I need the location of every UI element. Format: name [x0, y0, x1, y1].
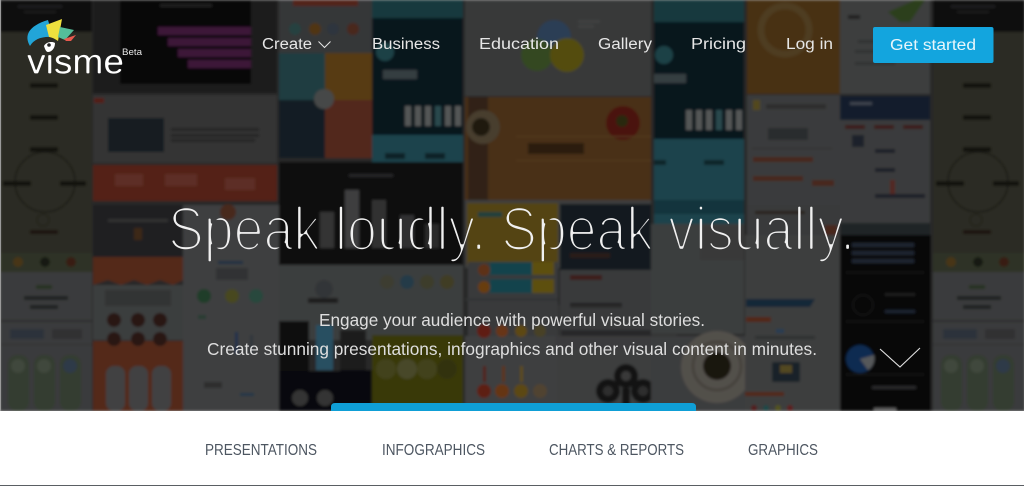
subtitle line 2: Create stunning presentations, infographics and other visual content in minutes. [207, 339, 817, 359]
thumbnail: red banner [93, 165, 277, 201]
title: Speak loudly. Speak visually. [168, 195, 855, 263]
logo [27, 19, 143, 82]
thumbnail: orange poster [93, 205, 183, 411]
tab: infographics: INFOGRAPHICS [382, 442, 485, 459]
nav item: Log in: Log in [786, 36, 833, 53]
thumbnail: teal and yellow chart [465, 200, 651, 339]
get started button: Get started [890, 37, 976, 54]
icon: colour fan eye [27, 19, 76, 52]
get started button [873, 27, 994, 63]
thumbnail: teal stats [372, 0, 463, 162]
nav item: Create: Create [262, 36, 312, 53]
thumbnail: venn diagram [465, 0, 651, 96]
subtitle line 1: Engage your audience with powerful visual stories. [319, 310, 705, 330]
tab: presentations: PRESENTATIONS [205, 442, 317, 459]
left edge strip [0, 0, 1, 411]
thumbnail: dark bar chart [279, 162, 463, 265]
tab labels [205, 442, 818, 459]
beta label: Beta [122, 47, 143, 58]
wordmark: visme [27, 42, 124, 82]
thumbnail: navy table poster [840, 96, 930, 235]
nav item: Business: Business [372, 36, 440, 53]
nav item: Create [262, 36, 330, 53]
thumbnail: teal stats second [654, 0, 744, 224]
thumbnail: wooden cutting board [465, 97, 651, 200]
nav item: Gallery: Gallery [598, 36, 652, 53]
tab: charts and reports: CHARTS & REPORTS [549, 442, 684, 459]
thumbnail: dark slide with pink bars [93, 0, 277, 93]
tab: graphics: GRAPHICS [748, 442, 818, 459]
thumbnail: infographic tiles [279, 0, 372, 158]
nav item: Education: Education [479, 36, 559, 53]
nav item: Pricing: Pricing [691, 36, 746, 53]
tabs panel [0, 411, 1024, 486]
call to action bar [331, 403, 696, 411]
thumbnail: coffee cup [651, 224, 753, 411]
thumbnail: left flow diagram column [0, 0, 92, 411]
thumbnail: bottom lists [745, 235, 840, 411]
thumbnail: colour dots and club icon [464, 305, 652, 403]
subtitle [207, 310, 817, 359]
thumbnail: circles and bars poster [183, 204, 279, 411]
thumbnail: grey slide with monitor [93, 95, 277, 163]
thumbnail: icon rows [279, 265, 463, 411]
thumbnail: brown card and map poster [747, 0, 930, 245]
arrow: scroll down chevron [880, 348, 920, 367]
navigation [262, 36, 833, 53]
thumbnail: black advantages poster [840, 235, 931, 411]
thumbnail: right flow diagram column [933, 0, 1024, 411]
